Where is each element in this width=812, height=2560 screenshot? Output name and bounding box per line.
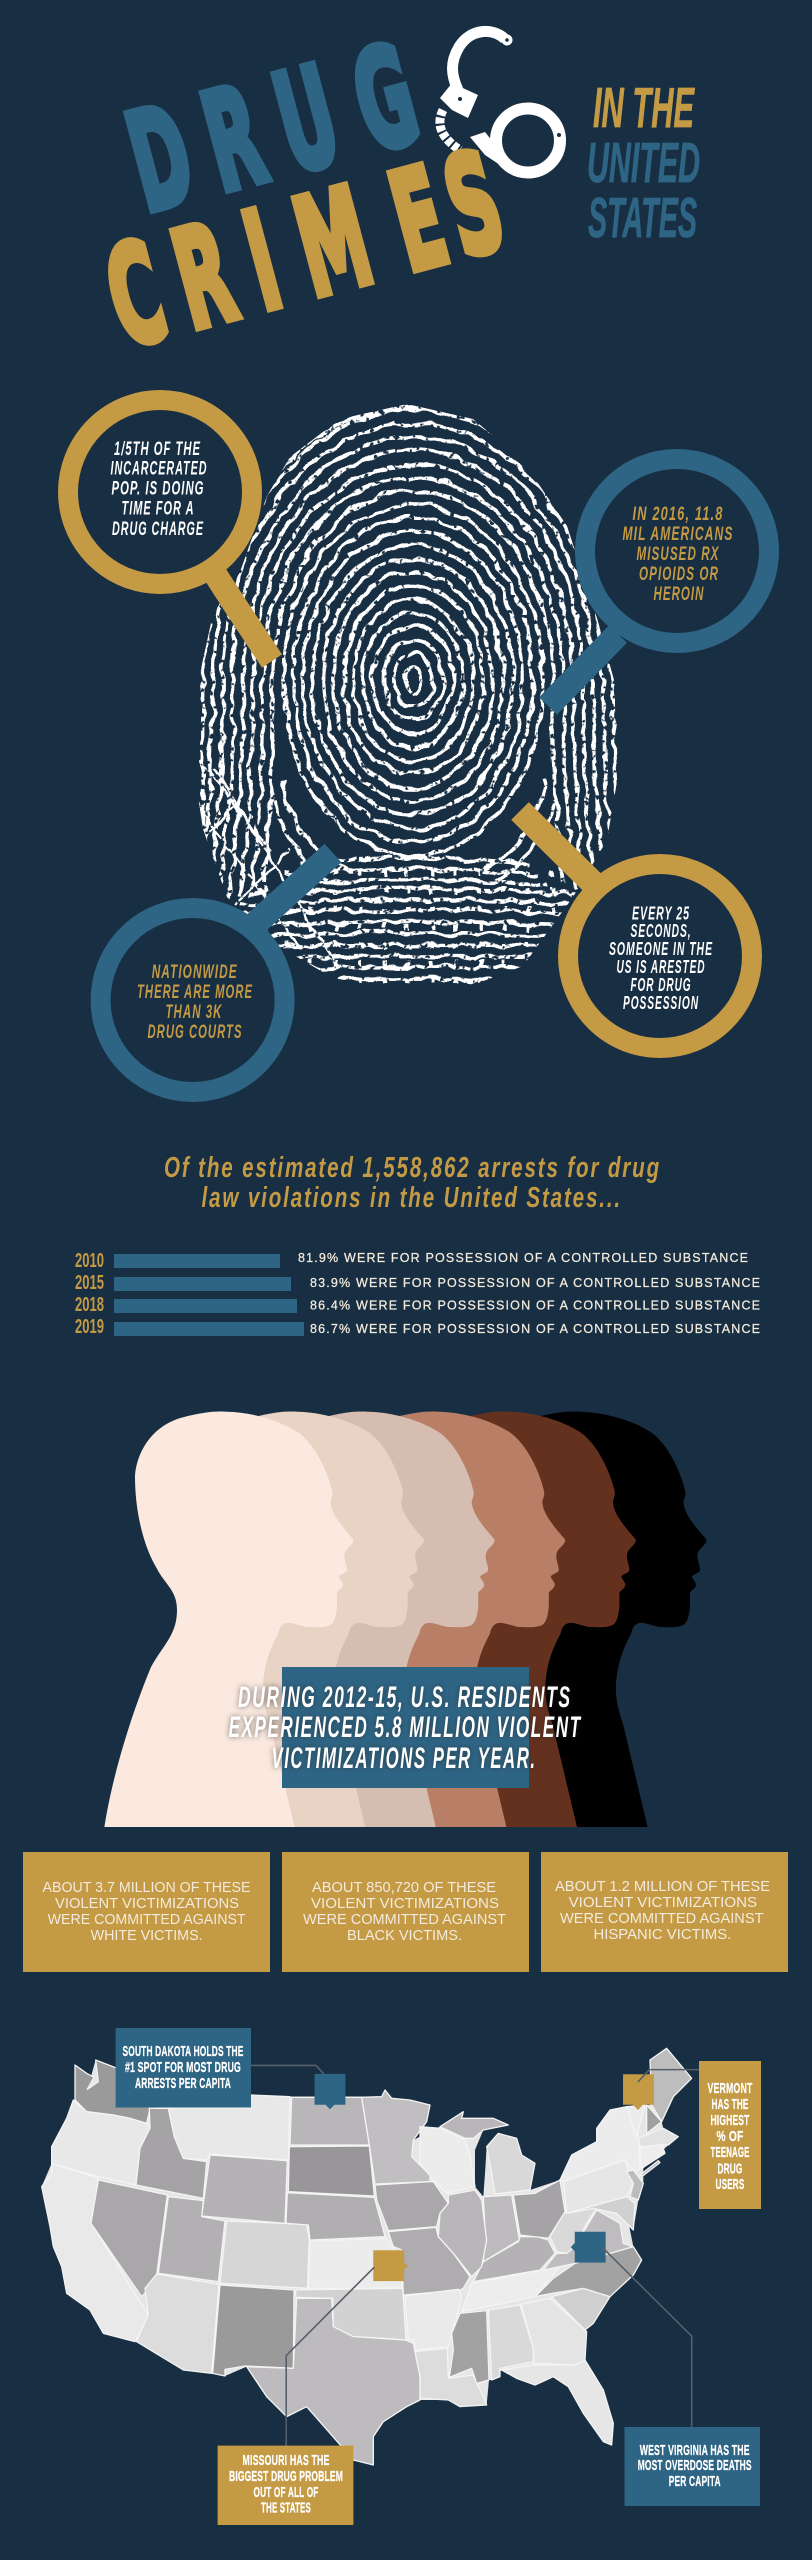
title: Drug Crimes in the United States [91, 16, 700, 379]
magnifier handle [520, 811, 600, 890]
pin: Missouri [373, 2250, 408, 2281]
year labels: 2019 [75, 1316, 104, 1338]
fact text [137, 962, 253, 1043]
subtitle: in the United States: STATES [588, 186, 697, 250]
panel: hispanic victims: HISPANIC VICTIMS. [594, 1927, 731, 1943]
fact text: US IS ARESTED [616, 957, 706, 977]
callout: Vermont: VERMONT [708, 2080, 752, 2097]
callout: West Virginia [624, 2427, 760, 2506]
bar value labels: 81.9% WERE FOR POSSESSION OF A CONTROLLED SUBSTANCE [298, 1251, 748, 1265]
callout: Vermont: USERS [716, 2176, 744, 2193]
illustration: head silhouettes in six skin tones [104, 1411, 706, 1827]
callout: South Dakota: #1 SPOT FOR MOST DRUG [125, 2059, 241, 2076]
panel: white victims: VIOLENT VICTIMIZATIONS [55, 1896, 239, 1912]
year labels: 2010 [75, 1250, 104, 1272]
title word: DRUG: DRUG [113, 16, 433, 243]
callout: Vermont: HIGHEST [710, 2112, 750, 2129]
fact text: FOR DRUG [630, 975, 692, 995]
panel: hispanic victims [541, 1852, 788, 1972]
magnifier ring [101, 908, 285, 1092]
heading: arrests for drug law violations [164, 1152, 661, 1214]
fact text: SOMEONE IN THE [609, 939, 713, 959]
callout: Vermont: TEENAGE [710, 2144, 750, 2161]
fact text: 1/5TH OF THE [114, 439, 201, 460]
fact text [110, 439, 208, 540]
callout: South Dakota [116, 2028, 251, 2108]
magnifier ring [585, 459, 769, 643]
map: United States [42, 2048, 692, 2465]
callout: Missouri [218, 2446, 353, 2525]
callout: violent victimizations: DURING 2012-15, U.S. RESIDENTS [238, 1681, 572, 1714]
callout: Vermont [699, 2061, 761, 2209]
magnifier ring [68, 400, 252, 584]
subtitle: in the United States: IN THE [593, 76, 695, 140]
fact text [622, 504, 734, 605]
callout: violent victimizations: VICTIMIZATIONS PER YEAR. [272, 1742, 536, 1775]
fact text: IN 2016, 11.8 [632, 504, 724, 525]
subtitle: in the United States: UNITED [587, 131, 700, 195]
bar value labels: 86.4% WERE FOR POSSESSION OF A CONTROLLED SUBSTANCE [310, 1298, 760, 1312]
fact text: THAN 3K [166, 1002, 222, 1023]
heading: arrests for drug law violations: law violations in the United States... [202, 1182, 622, 1214]
fact text: NATIONWIDE [152, 962, 238, 983]
callout: Missouri: THE STATES [261, 2500, 311, 2516]
fact text: POSSESSION [623, 993, 699, 1013]
pin: South Dakota [315, 2074, 345, 2109]
fact text: SECONDS, [630, 921, 692, 941]
magnifier handle [254, 853, 333, 925]
leader: South Dakota [251, 2065, 329, 2080]
panel: hispanic victims: WERE COMMITTED AGAINST [560, 1911, 764, 1927]
bar value labels: 86.7% WERE FOR POSSESSION OF A CONTROLLED SUBSTANCE [310, 1322, 760, 1336]
leader: West Virginia [602, 2247, 692, 2427]
bar value labels [298, 1251, 760, 1336]
callout: Missouri: MISSOURI HAS THE [242, 2452, 330, 2469]
callout: violent victimizations [229, 1667, 582, 1788]
panel: white victims: WERE COMMITTED AGAINST [48, 1912, 246, 1928]
fact text [609, 904, 713, 1013]
panel: black victims: VIOLENT VICTIMIZATIONS [311, 1896, 499, 1912]
callout: Missouri: OUT OF ALL OF [254, 2484, 318, 2501]
map pins and leader lines [251, 2065, 699, 2446]
panel: blue magnifier, drug courts [101, 853, 333, 1092]
panel: gold magnifier, incarcerated population [68, 400, 272, 661]
panel: hispanic victims: ABOUT 1.2 MILLION OF THESE [555, 1879, 770, 1895]
callout: West Virginia: PER CAPITA [669, 2473, 721, 2490]
callout: Vermont: DRUG [718, 2160, 742, 2178]
fact text: DRUG COURTS [148, 1022, 242, 1043]
fact text: MIL AMERICANS [622, 524, 734, 545]
callout: South Dakota: SOUTH DAKOTA HOLDS THE [122, 2043, 244, 2060]
fact text: THERE ARE MORE [137, 982, 253, 1003]
leader: Missouri [286, 2267, 374, 2446]
panel: hispanic victims: VIOLENT VICTIMIZATIONS [569, 1895, 757, 1911]
fact text: MISUSED RX [636, 544, 720, 565]
callout: Missouri: BIGGEST DRUG PROBLEM [229, 2468, 343, 2485]
panel: black victims [282, 1852, 529, 1972]
panel: gold magnifier, arrest frequency [520, 811, 752, 1048]
bar chart: possession share by year [75, 1250, 760, 1338]
panel: white victims: ABOUT 3.7 MILLION OF THESE [42, 1880, 251, 1896]
callout: Vermont: HAS THE [712, 2096, 748, 2113]
pin: West Virginia [571, 2232, 606, 2263]
panel: white victims [23, 1852, 270, 1972]
panel: black victims: ABOUT 850,720 OF THESE [312, 1880, 496, 1896]
fact text: OPIOIDS OR [639, 564, 719, 585]
year labels: 2018 [75, 1294, 104, 1316]
subtitle: in the United States [587, 76, 700, 250]
fingerprint [191, 407, 635, 990]
fact text: DRUG CHARGE [112, 519, 204, 540]
bar value labels: 83.9% WERE FOR POSSESSION OF A CONTROLLED SUBSTANCE [310, 1276, 760, 1290]
year labels: 2015 [75, 1272, 104, 1294]
magnifier handle [548, 634, 618, 706]
leader: Vermont [638, 2070, 699, 2082]
fact text: INCARCERATED [110, 459, 208, 480]
fact text: HEROIN [654, 584, 704, 605]
callout: South Dakota: ARRESTS PER CAPITA [135, 2075, 231, 2092]
fact text: TIME FOR A [122, 499, 194, 520]
pin: Vermont [623, 2074, 654, 2110]
panel: black victims: WERE COMMITTED AGAINST [303, 1912, 506, 1928]
panel: black victims: BLACK VICTIMS. [347, 1928, 462, 1944]
title word: CRIMES: CRIMES [91, 123, 518, 379]
icon: handcuffs [440, 31, 561, 172]
bars [114, 1254, 304, 1336]
year labels [75, 1250, 104, 1338]
panel: white victims: WHITE VICTIMS. [91, 1928, 203, 1944]
fact text: EVERY 25 [632, 904, 690, 924]
callout: Vermont: % OF [716, 2128, 744, 2145]
magnifier ring [568, 864, 752, 1048]
fact text: POP. IS DOING [112, 478, 204, 499]
magnifier handle [215, 574, 272, 661]
panel: blue magnifier, opioid misuse [548, 459, 769, 706]
